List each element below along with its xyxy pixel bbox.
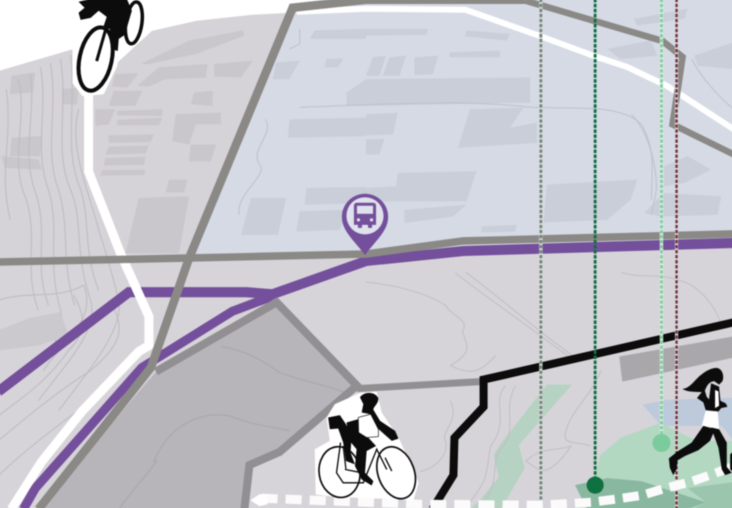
illustration: top cyclist (73, 0, 149, 96)
jersey (358, 414, 378, 438)
arm highlight (715, 390, 719, 408)
dashed guide: light green (660, 0, 663, 437)
dashed guide: dark green (594, 0, 597, 481)
grey building strip (619, 336, 732, 382)
blue district buildings east (366, 9, 732, 233)
transit line: purple branch south (23, 296, 273, 508)
road: grey east boundary (526, 1, 732, 155)
dashed guide: grey-green (539, 0, 543, 508)
frame (337, 443, 392, 483)
road: grey horizontal (0, 234, 732, 262)
front wheel (73, 24, 118, 94)
land base south (0, 235, 732, 508)
front leg (711, 428, 732, 475)
marker: light green dot (652, 434, 671, 452)
trail arrowhead (250, 494, 268, 506)
green strip (471, 385, 572, 508)
rear wheel (316, 444, 363, 500)
icon: bus stop pin (342, 194, 388, 255)
back and leg (328, 415, 355, 464)
torso (697, 383, 727, 411)
parcel contour lines (119, 346, 345, 508)
rider (79, 0, 132, 51)
dark green patch west (575, 478, 706, 508)
hair (682, 368, 723, 392)
front wheel (370, 441, 422, 504)
light green park (587, 423, 732, 508)
topographic contours west (0, 55, 119, 476)
rear wheel (123, 1, 145, 45)
icon: bus (354, 203, 376, 228)
land buildings (2, 31, 253, 253)
land base (0, 13, 297, 508)
helmet and arm (360, 393, 398, 441)
dashed guide: dark red (675, 0, 678, 508)
shorts (702, 411, 719, 429)
road: grey district boundary (38, 0, 526, 508)
road: grey link (357, 382, 481, 389)
road: black trail (432, 322, 732, 508)
creek lines in blue district (239, 29, 732, 215)
district: blue industrial area (189, 0, 732, 258)
contours in grey parcel (38, 299, 357, 508)
contours south (366, 272, 722, 506)
dark green patch east (688, 482, 732, 508)
transit line: purple branch north (0, 243, 732, 392)
road: white west trail (11, 89, 149, 508)
illustration: runner (669, 368, 732, 475)
road: white upper trail (297, 9, 732, 129)
blue district buildings west (241, 29, 366, 235)
blue pond (642, 398, 732, 441)
marker: dark green dot (587, 477, 604, 494)
back leg (669, 426, 715, 475)
road: grey parcel edge (156, 302, 357, 508)
illustration: lower cyclist (315, 392, 422, 504)
dashed white trail (250, 466, 732, 506)
contour shadow west (0, 312, 69, 350)
far foot (730, 451, 732, 473)
